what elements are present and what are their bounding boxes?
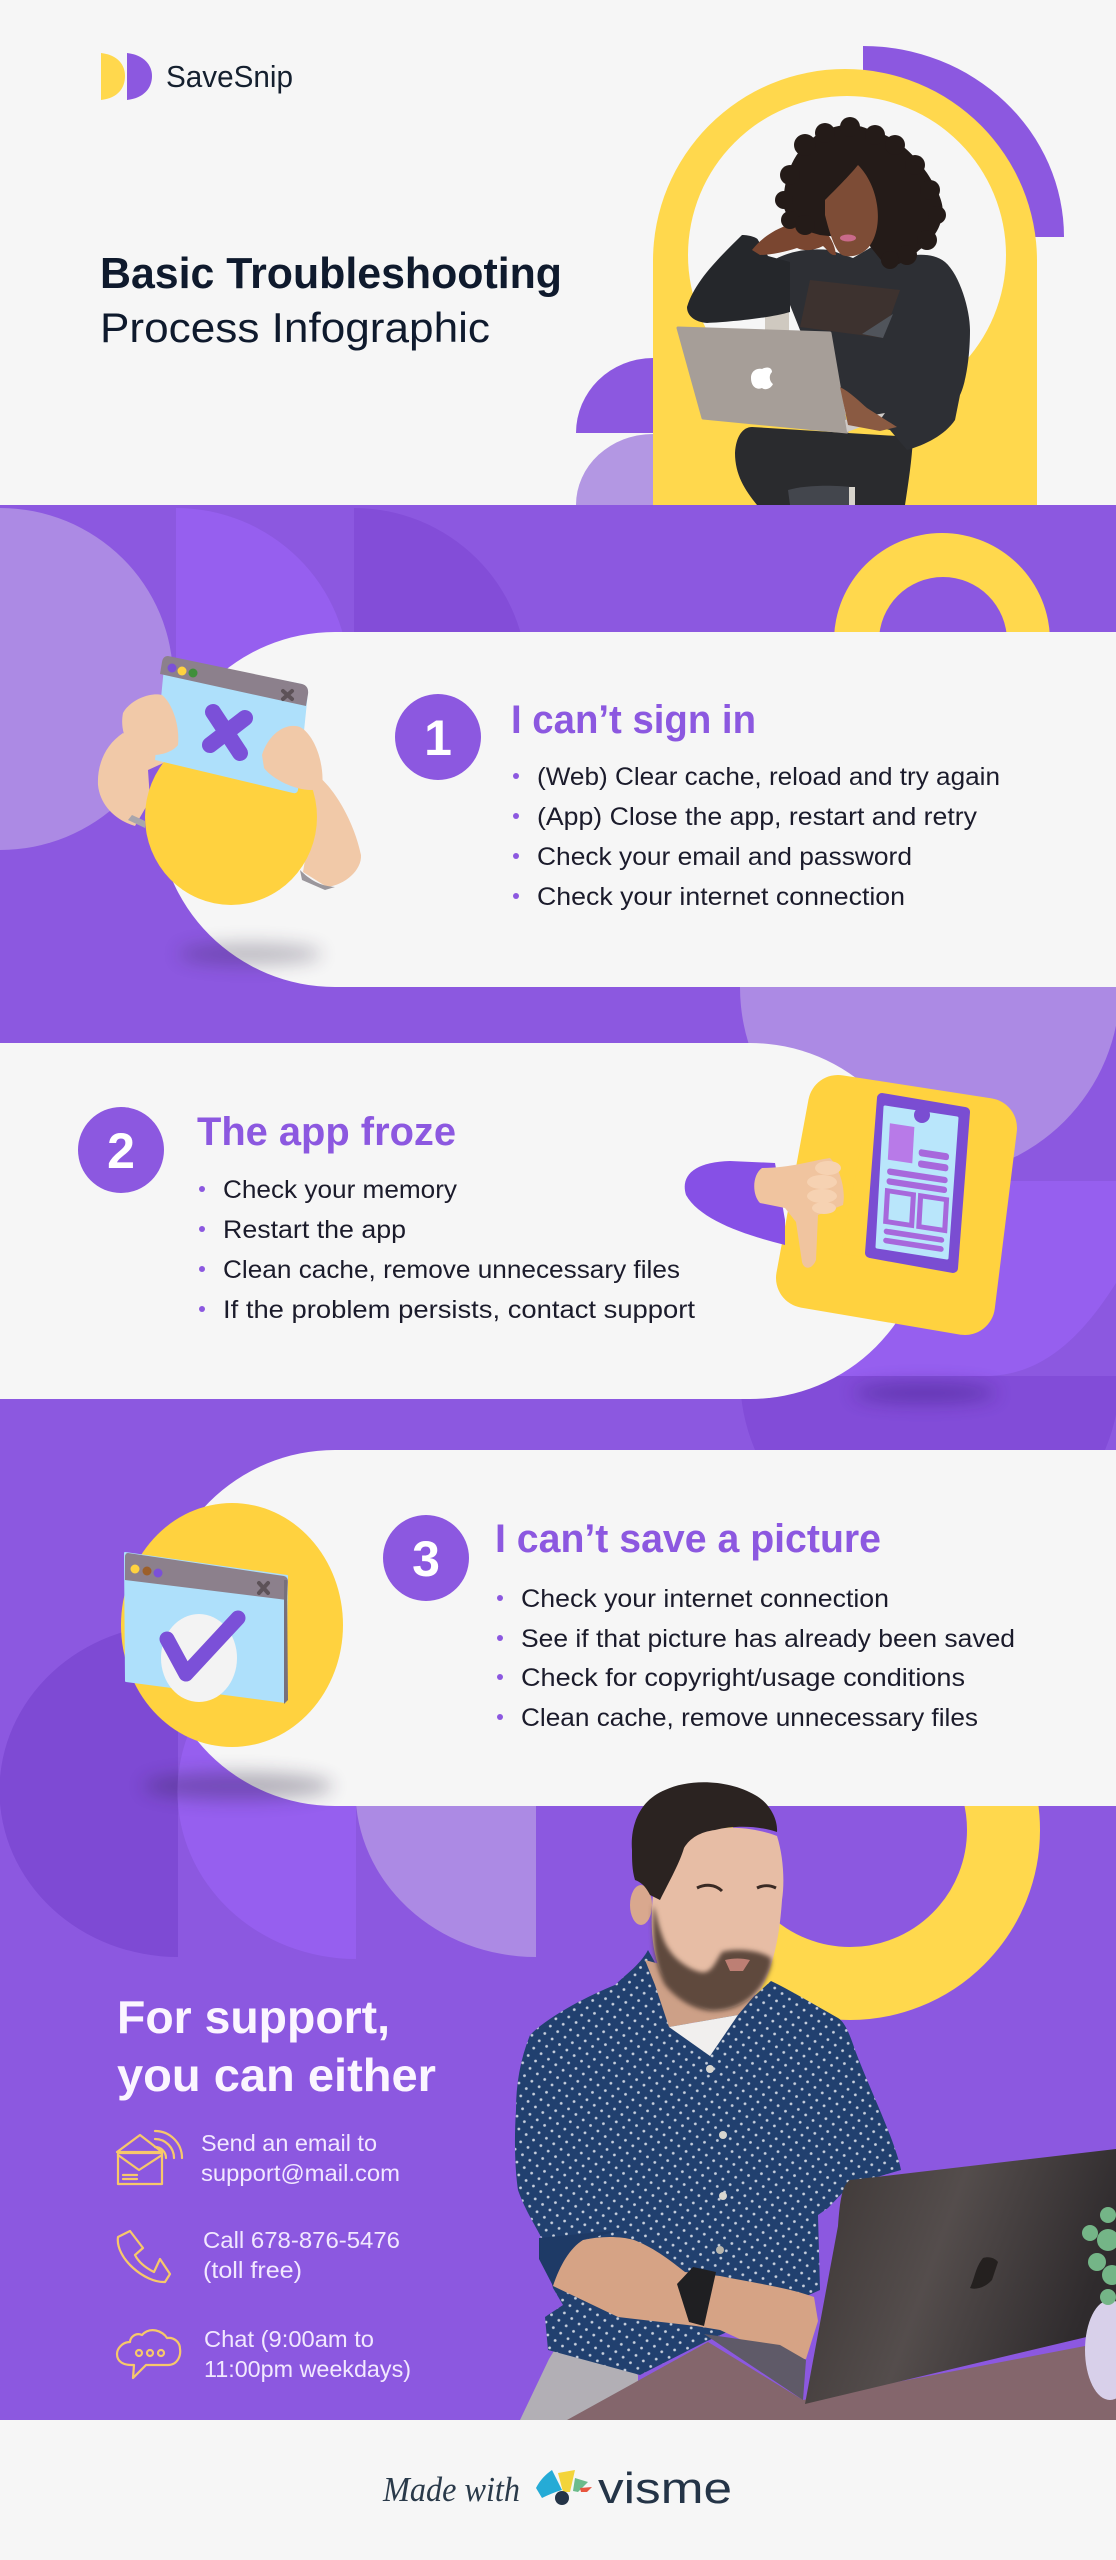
step 1 heading: I can’t sign in xyxy=(511,698,756,742)
chat text: Chat (9:00am to xyxy=(204,2326,374,2352)
footer: visme logo: visme xyxy=(598,2464,732,2513)
step 1 list: (App) Close the app, restart and retry xyxy=(537,803,978,831)
logo: SaveSnip: SaveSnip xyxy=(166,59,293,94)
step 2 number: 2 xyxy=(107,1123,135,1179)
support heading xyxy=(117,1991,436,2101)
footer: visme logo xyxy=(536,2464,732,2513)
step 2 list: Restart the app xyxy=(223,1216,406,1244)
step 1 list: (Web) Clear cache, reload and try again xyxy=(537,763,1000,791)
step 2 number xyxy=(78,1107,164,1193)
phone text: Call 678-876-5476 xyxy=(203,2227,400,2253)
icon: email xyxy=(117,2131,182,2184)
panel: step 3 card xyxy=(157,1450,1116,1806)
title: Process Infographic xyxy=(100,304,490,351)
step 3 list: Check your internet connection xyxy=(521,1585,889,1613)
step 1 number xyxy=(395,694,481,780)
email text: Send an email to xyxy=(201,2130,377,2156)
yellow ring: bottom xyxy=(726,1806,1040,2020)
illustration: person holding error window xyxy=(98,656,361,965)
support heading: For support, xyxy=(117,1991,390,2043)
chat text xyxy=(204,2326,411,2382)
step 1 list: Check your email and password xyxy=(537,843,912,871)
phone text xyxy=(203,2227,400,2283)
footer: made with: Made with xyxy=(382,2470,520,2509)
illustration: check window on yellow disc xyxy=(121,1503,343,1800)
chat text: 11:00pm weekdays) xyxy=(204,2356,411,2382)
step 2 list: Clean cache, remove unnecessary files xyxy=(223,1256,680,1284)
yellow ring: top of band xyxy=(834,533,1050,641)
step 2 list xyxy=(199,1176,695,1324)
logo: SaveSnip xyxy=(101,53,293,100)
support heading: you can either xyxy=(117,2049,436,2101)
step 1 list xyxy=(513,763,1000,911)
panel: step 1 card xyxy=(158,632,1116,987)
step 3 list: Clean cache, remove unnecessary files xyxy=(521,1704,978,1732)
step 1 list: Check your internet connection xyxy=(537,883,905,911)
phone text: (toll free) xyxy=(203,2257,302,2283)
title: Basic Troubleshooting xyxy=(100,249,562,298)
title xyxy=(100,249,562,351)
step 3 number xyxy=(383,1515,469,1601)
step 3 list: Check for copyright/usage conditions xyxy=(521,1664,965,1692)
email text: support@mail.com xyxy=(201,2160,400,2186)
panel: step 2 card xyxy=(0,1043,928,1399)
photo: woman with laptop xyxy=(678,117,970,505)
icon: phone xyxy=(118,2231,170,2282)
icon: chat xyxy=(117,2330,180,2378)
step 2 list: If the problem persists, contact support xyxy=(223,1296,695,1324)
illustration: thumbs down and phone xyxy=(685,1098,997,1403)
email text xyxy=(201,2130,400,2186)
step 3 number: 3 xyxy=(412,1531,440,1587)
purple main band xyxy=(0,505,1116,2420)
band decorative half discs xyxy=(0,508,1116,1959)
step 1 number: 1 xyxy=(424,710,452,766)
step 3 list: See if that picture has already been saved xyxy=(521,1625,1015,1653)
step 3 list xyxy=(497,1585,1015,1732)
step 3 heading: I can’t save a picture xyxy=(495,1517,881,1561)
footer background xyxy=(0,2420,1116,2560)
step 2 list: Check your memory xyxy=(223,1176,458,1204)
photo: man typing on laptop xyxy=(515,1782,1116,2420)
step 2 heading: The app froze xyxy=(197,1110,456,1154)
header shapes: arch and quarter discs xyxy=(576,46,1064,505)
